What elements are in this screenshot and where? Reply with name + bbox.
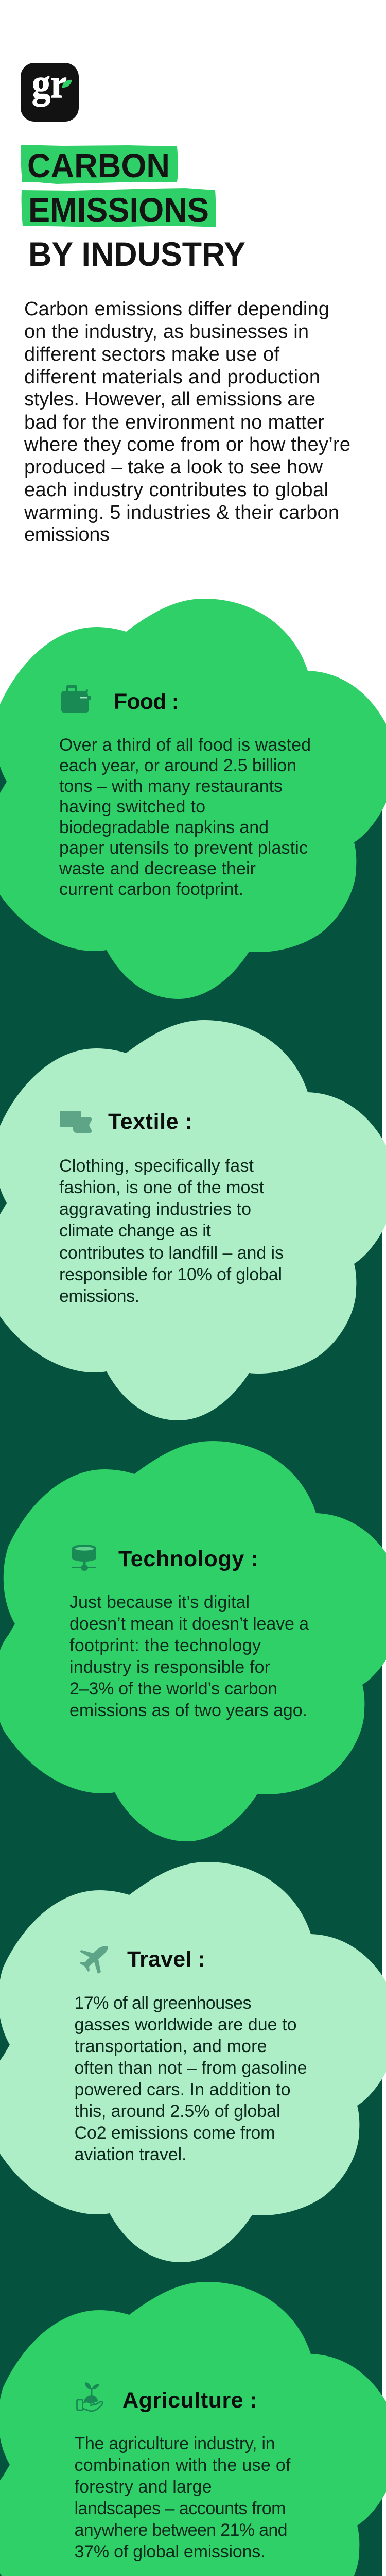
text: technology: industry is responsible for bbox=[69, 1657, 270, 1677]
intro paragraph: emissions bbox=[24, 524, 110, 546]
intro paragraph: produced – take a look to see how bbox=[24, 456, 323, 478]
text: textile: aggravating industries to bbox=[59, 1199, 251, 1219]
text: technology: footprint: the technology bbox=[69, 1636, 261, 1655]
intro paragraph: different materials and production bbox=[24, 366, 320, 388]
intro paragraph: styles. However, all emissions are bbox=[24, 388, 315, 410]
panel: agriculture bbox=[0, 2282, 386, 2576]
text: food: current carbon footprint. bbox=[59, 879, 243, 899]
text: travel: often than not – from gasoline bbox=[74, 2058, 307, 2078]
heading: travel: Travel : bbox=[127, 1947, 205, 1972]
text: textile: fashion, is one of the most bbox=[59, 1178, 265, 1197]
intro paragraph: each industry contributes to global bbox=[24, 479, 328, 501]
icon: airplane bbox=[80, 1946, 108, 1974]
dark green panel bbox=[0, 737, 382, 2576]
panel: textile bbox=[0, 1020, 386, 1420]
cloud: travel bbox=[0, 1862, 386, 2262]
title: CARBON bbox=[27, 146, 170, 184]
text: textile: contributes to landfill – and is bbox=[59, 1243, 284, 1263]
text: agriculture: anywhere between 21% and bbox=[74, 2520, 287, 2540]
icon: fabric bbox=[60, 1111, 92, 1133]
intro paragraph: different sectors make use of bbox=[24, 344, 279, 365]
text: food: paper utensils to prevent plastic bbox=[59, 838, 308, 858]
text: travel: gasses worldwide are due to bbox=[74, 2015, 296, 2035]
intro paragraph bbox=[24, 298, 350, 546]
text: agriculture: forestry and large bbox=[74, 2477, 212, 2497]
intro paragraph: on the industry, as businesses in bbox=[24, 321, 309, 343]
text: food: tons – with many restaurants bbox=[59, 776, 283, 796]
text: travel: this, around 2.5% of global bbox=[74, 2102, 280, 2121]
title: BY INDUSTRY bbox=[28, 235, 245, 273]
intro paragraph: where they come from or how they’re bbox=[24, 434, 350, 455]
heading: technology: Technology : bbox=[118, 1547, 258, 1571]
text: textile: Clothing, specifically fast bbox=[59, 1156, 254, 1176]
icon: hand with seedling bbox=[77, 2382, 102, 2411]
cloud: agriculture bbox=[0, 2282, 386, 2576]
title highlight: carbon bbox=[21, 145, 178, 184]
intro paragraph: bad for the environment no matter bbox=[24, 412, 324, 433]
text: travel: powered cars. In addition to bbox=[74, 2080, 290, 2099]
cloud: textile bbox=[0, 1020, 386, 1420]
cloud: food bbox=[0, 599, 386, 999]
title bbox=[21, 145, 245, 273]
text: food: biodegradable napkins and bbox=[59, 818, 269, 837]
icon: food basket bbox=[61, 685, 91, 713]
text: technology: emissions as of two years ago. bbox=[69, 1701, 307, 1720]
text: travel bbox=[74, 1993, 307, 2164]
text: food: waste and decrease their bbox=[59, 859, 256, 878]
text: travel: transportation, and more bbox=[74, 2037, 267, 2056]
text: agriculture: combination with the use of bbox=[74, 2455, 291, 2475]
panel: technology bbox=[0, 1441, 386, 1841]
text: textile: climate change as it bbox=[59, 1221, 212, 1241]
text: food: having switched to bbox=[59, 797, 205, 817]
text: travel: Co2 emissions come from bbox=[74, 2123, 275, 2143]
text: travel: 17% of all greenhouses bbox=[74, 1993, 251, 2013]
text: food: Over a third of all food is wasted bbox=[59, 735, 311, 755]
text: food bbox=[59, 735, 311, 899]
panel: travel bbox=[0, 1862, 386, 2262]
text: textile: emissions. bbox=[59, 1286, 139, 1306]
heading: agriculture: Agriculture : bbox=[122, 2388, 257, 2413]
text: technology bbox=[69, 1592, 309, 1720]
text: agriculture bbox=[74, 2434, 291, 2562]
text: food: each year, or around 2.5 billion bbox=[59, 756, 296, 775]
icon: server bbox=[72, 1545, 96, 1571]
logo: gr app icon: gr bbox=[32, 61, 67, 107]
heading: textile: Textile : bbox=[108, 1109, 192, 1134]
text: agriculture: The agriculture industry, in bbox=[74, 2434, 275, 2453]
cloud: technology bbox=[0, 1441, 386, 1841]
panel: food bbox=[0, 599, 386, 999]
heading: food: Food : bbox=[114, 689, 179, 714]
text: textile: responsible for 10% of global bbox=[59, 1265, 282, 1284]
text: travel: aviation travel. bbox=[74, 2145, 186, 2164]
logo: gr app icon bbox=[21, 61, 79, 122]
title highlight: emissions bbox=[22, 188, 216, 227]
intro paragraph: warming. 5 industries & their carbon bbox=[24, 502, 339, 523]
text: textile bbox=[59, 1156, 284, 1306]
text: technology: doesn’t mean it doesn’t leave a bbox=[69, 1614, 309, 1634]
title: EMISSIONS bbox=[28, 191, 209, 229]
intro paragraph: Carbon emissions differ depending bbox=[24, 298, 329, 320]
text: agriculture: 37% of global emissions. bbox=[74, 2542, 266, 2562]
text: technology: Just because it’s digital bbox=[69, 1592, 250, 1612]
text: agriculture: landscapes – accounts from bbox=[74, 2499, 286, 2518]
text: technology: 2–3% of the world’s carbon bbox=[69, 1679, 277, 1699]
